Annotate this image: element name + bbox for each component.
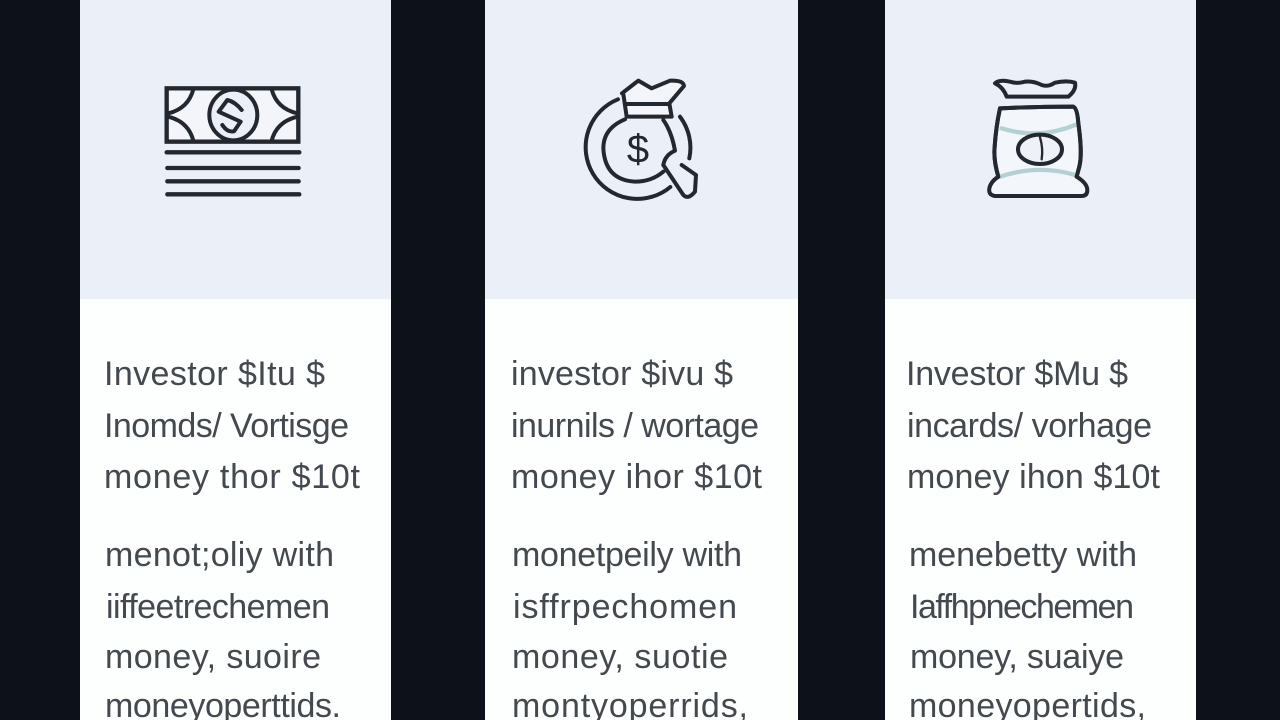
text block: money bag: isffrpechomen bbox=[513, 588, 737, 626]
text block: sack: menebetty with bbox=[909, 536, 1137, 574]
text block: money bag bbox=[511, 355, 763, 720]
text block: sack: Iaffhpnechemen bbox=[910, 588, 1134, 626]
text block: cash stack: iiffeetrechemen bbox=[106, 588, 330, 626]
panel: sack bbox=[885, 0, 1196, 720]
text block: sack: money, suaiye bbox=[910, 638, 1124, 676]
text block: cash stack: money thor $10t bbox=[104, 458, 361, 496]
icon: banknote stack bbox=[167, 88, 299, 194]
text block: sack: Investor $Mu $ bbox=[906, 355, 1128, 393]
text block: sack bbox=[906, 355, 1161, 720]
text block: money bag: monetpeily with bbox=[512, 536, 742, 574]
text block: money bag: investor $ivu $ bbox=[511, 355, 733, 393]
text block: cash stack: Inomds/ Vortisge bbox=[104, 407, 349, 445]
icon: money bag with target rings bbox=[586, 81, 696, 199]
text block: sack: incards/ vorhage bbox=[907, 407, 1152, 445]
panel: cash stack bbox=[80, 0, 391, 720]
text block: cash stack bbox=[104, 355, 361, 720]
text block: cash stack: money, suoire bbox=[105, 638, 321, 676]
text block: money bag: money ihor $10t bbox=[511, 458, 763, 496]
icon: tied sack bbox=[989, 81, 1087, 196]
panel: money bag bbox=[485, 0, 798, 720]
text block: cash stack: menot;oliy with bbox=[105, 536, 334, 574]
text block: sack: money ihon $10t bbox=[907, 458, 1161, 496]
text block: money bag: money, suotie bbox=[512, 638, 728, 676]
text block: cash stack: Investor $Itu $ bbox=[104, 355, 325, 393]
icon: money bag with target rings: $ bbox=[627, 128, 649, 172]
text block: money bag: inurnils / wortage bbox=[511, 407, 759, 445]
